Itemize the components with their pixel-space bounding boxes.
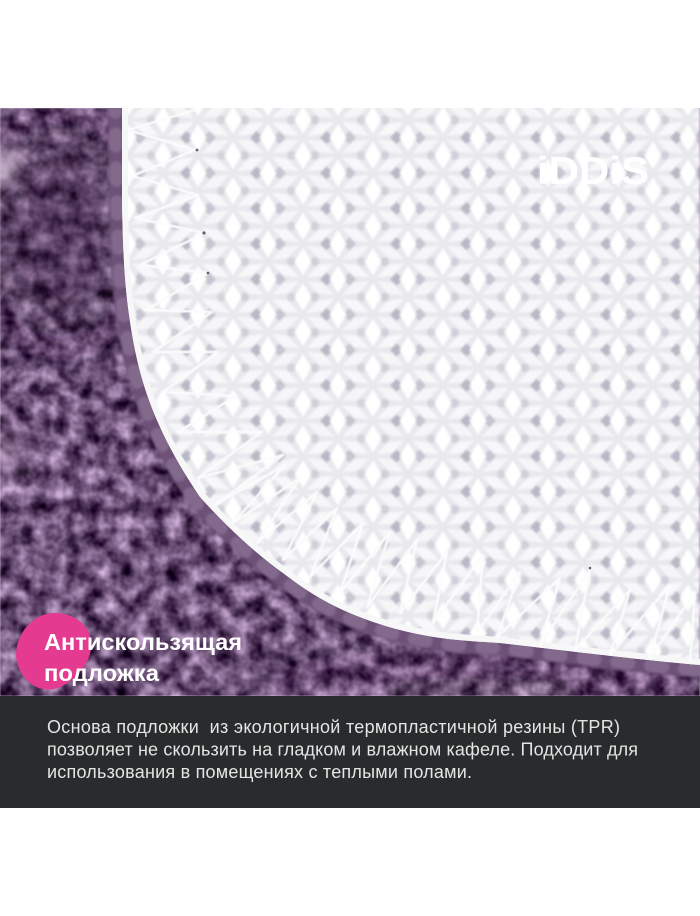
- heading: [44, 629, 242, 686]
- logo: IDDIS: iDDiS: [537, 150, 649, 193]
- description text: использования в помещениях с теплыми полами.: [47, 762, 472, 782]
- registered mark: ®: [650, 143, 656, 152]
- carpet pile: [0, 108, 700, 712]
- description text: Основа подложки из экологичной термопластичной резины (TPR): [47, 717, 620, 737]
- photo: purple bath mat turned over: [0, 100, 700, 712]
- heading: подложка: [44, 660, 160, 686]
- description panel: [0, 696, 700, 808]
- mat underside: textured rubber: [122, 108, 700, 665]
- description text: позволяет не скользить на гладком и влажном кафеле. Подходит для: [47, 740, 638, 760]
- pink blob accent: [16, 613, 91, 690]
- infographic canvas: [0, 108, 700, 808]
- stitch marks: [196, 149, 591, 569]
- description text: [47, 717, 638, 782]
- heading: Антискользящая: [44, 629, 242, 655]
- rim stitching band: [122, 100, 700, 665]
- zigzag overlock stitches: [128, 110, 695, 662]
- mat hem: [115, 100, 700, 670]
